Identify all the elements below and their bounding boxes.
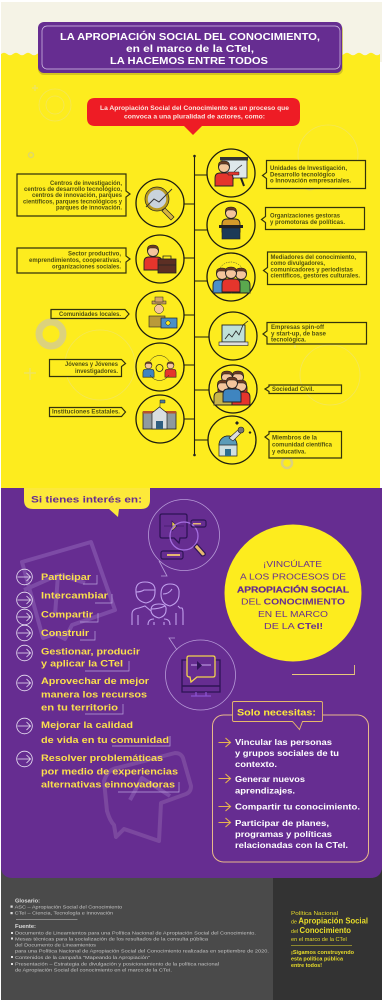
item: resolver: por medio de experiencias <box>41 766 178 776</box>
icon: young people <box>136 343 184 391</box>
item: aprovechar: en tu territorio <box>41 702 118 712</box>
text box: research units <box>262 160 366 188</box>
text box: productive sector: organizaciones sociales. <box>52 264 121 270</box>
heading tab: si tienes interés en <box>24 488 150 517</box>
text box: state institutions: Instituciones Estatales. <box>52 410 120 416</box>
text box: local communities <box>51 310 129 318</box>
item: gestionar <box>17 645 140 671</box>
footer: sources: Mesas técnicas para la socialización de los resultados de la consulta pública <box>15 936 208 941</box>
item: mejorar <box>17 718 170 746</box>
item: aprovechar: manera los recursos <box>41 688 147 700</box>
title text: LA APROPIACIÓN SOCIAL DEL CONOCIMIENTO, <box>60 30 320 43</box>
timeline spine and branches <box>184 155 209 456</box>
item: resolver <box>17 751 179 792</box>
text box: civil society: Sociedad Civil. <box>272 387 314 393</box>
corner accent under circle <box>292 665 354 674</box>
text box: spin-off companies <box>263 322 366 344</box>
item: generar: Generar nuevos <box>235 775 306 784</box>
item: compartir <box>17 608 98 625</box>
text box: policy organizations: Organizaciones gestoras <box>270 214 341 220</box>
title text: LA HACEMOS ENTRE TODOS <box>110 55 268 67</box>
footer: policy branding: entre todos! <box>291 963 322 969</box>
footer: sources: para una Política Nacional de Apropiación Social del Conocimiento realizadas en septiembre de 2020. <box>15 949 269 954</box>
list: interests <box>17 569 179 792</box>
text box: policy organizations <box>262 208 364 230</box>
call to action circle: EN EL MARCO <box>258 610 328 619</box>
icon: policy organizations podium <box>207 201 255 249</box>
call to action circle: A LOS PROCESOS DE <box>240 572 346 582</box>
text box: young people <box>50 360 126 376</box>
item: aprovechar <box>17 675 149 714</box>
callout: red intro bubble <box>87 98 300 135</box>
item: vincular <box>218 738 339 769</box>
heading tab: si tienes interés en: Si tienes interés en: <box>31 494 142 506</box>
footer: policy branding <box>291 911 368 969</box>
item: mejorar: de vida en tu comunidad <box>41 734 169 745</box>
footer: policy branding: Política Nacional <box>291 911 338 917</box>
icon: spin-off laptop <box>209 312 257 360</box>
footer: glossary: ASC – Apropiación Social del Conocimiento <box>15 905 123 910</box>
text box: young people: Jóvenes y Jóvenes <box>65 362 119 368</box>
background: top cream band <box>1 2 382 62</box>
item: participar <box>17 569 97 585</box>
icon: investigation units presenter <box>207 149 255 197</box>
text box: scientific community <box>265 432 342 458</box>
text box: productive sector: Sector productivo, <box>68 251 121 257</box>
footer: sources: Presentación – Estrategia de divulgación y posicionamiento de la política nacional <box>15 962 219 967</box>
text box: local communities: Comunidades locales. <box>59 312 121 318</box>
item: construir: Construir <box>41 627 89 638</box>
item: construir <box>17 625 95 641</box>
text box: research centers: centros de innovación, parques <box>32 193 123 199</box>
footer: glossary: CTeI – Ciencia, Tecnología e Innovación <box>15 911 114 916</box>
call to action circle <box>224 524 362 662</box>
icon: state institutions building <box>136 395 184 443</box>
footer: policy branding: esta política pública <box>291 956 343 962</box>
text box: mediators: comunicadores y periodistas <box>270 267 354 273</box>
text box: productive sector <box>17 248 130 273</box>
callout: red intro bubble: convoca a una pluralidad de actores, como: <box>124 114 265 120</box>
call to action circle: APROPIACIÓN SOCIAL <box>237 586 349 594</box>
item: mejorar: Mejorar la calidad <box>41 719 133 730</box>
title text: en el marco de la CTeI, <box>126 43 254 55</box>
call to action circle: DE LA CTeI! <box>264 622 323 631</box>
heading: solo necesitas <box>232 702 322 730</box>
footer: glossary <box>10 898 123 920</box>
footer: sources: Contenidos de la campaña "Mapeando la Apropiación" <box>15 955 150 960</box>
item: participar de planes: Participar de planes, <box>235 819 329 828</box>
icon: scientific community observatory <box>208 416 256 464</box>
call to action circle: ¡VINCÚLATE <box>263 560 322 569</box>
decorative background shapes <box>24 85 360 468</box>
title text <box>60 30 320 67</box>
item: intercambiar: Intercambiar <box>41 590 108 600</box>
item: compartir conocimiento <box>218 802 360 812</box>
footer: sources: de Apropiación Social del conocimiento en el marco de la CTeI. <box>15 968 172 973</box>
text box: research centers: científicos, parques tecnológicos y <box>23 200 123 206</box>
item: participar de planes <box>218 818 348 850</box>
item: participar de planes: programas y políticas <box>235 830 333 839</box>
footer: glossary: Glosario: <box>15 898 40 904</box>
text box: spin-off companies: y start-up, de base <box>271 331 327 337</box>
item: participar de planes: relacionadas con la CTeI. <box>235 841 348 850</box>
item: gestionar: Gestionar, producir <box>41 646 140 656</box>
icon: family outline <box>132 582 183 625</box>
text box: mediators: Mediadores del conocimiento, <box>270 255 356 261</box>
callout: red intro bubble: La Apropiación Social del Conocimiento es un proceso que <box>100 105 290 112</box>
text box: research centers <box>17 174 130 216</box>
item: resolver: alternativas einnovadoras <box>41 778 175 790</box>
decorative speech bubbles <box>22 542 191 841</box>
footer: sources <box>11 924 269 973</box>
item: generar: aprendizajes. <box>235 786 295 796</box>
panel: purple section <box>1 488 382 878</box>
title banner <box>38 22 343 75</box>
footer background <box>1 860 382 1000</box>
item: participar: Participar <box>41 571 91 582</box>
icon: knowledge mediators group <box>207 253 255 301</box>
text box: spin-off companies: Empresas spin-off <box>271 325 325 331</box>
heading: solo necesitas: Solo necesitas: <box>237 708 316 718</box>
icon: civil society crowd <box>209 365 257 413</box>
text box: policy organizations: y promotoras de políticas. <box>270 220 345 226</box>
background: yellow panel <box>1 53 380 490</box>
footer: policy branding: en el marco de la CTeI <box>291 937 347 943</box>
footer: sources: Documento de Lineamientos para una Política Nacional de Apropiación Social del Conocimiento. <box>15 931 256 936</box>
text box: research centers: Centros de investigación, <box>50 181 122 187</box>
item: aprovechar: Aprovechar de mejor <box>41 675 149 686</box>
item: vincular: contexto. <box>235 760 277 769</box>
panel: solo necesitas <box>212 702 368 862</box>
call to action circle: DEL CONOCIMIENTO <box>241 598 345 606</box>
footer: policy branding: del Conocimiento <box>291 926 351 935</box>
footer: sources: del Documento de Lineamientos <box>15 943 97 948</box>
icon: monitor circle with video bubble <box>166 638 236 710</box>
text box: mediators: científicos, gestores culturales. <box>270 274 360 280</box>
text box: research units: o Innovación empresariales. <box>270 178 351 184</box>
item: vincular: Vincular las personas <box>235 738 333 747</box>
item: resolver: Resolver problemáticas <box>41 752 163 763</box>
item: generar <box>218 774 306 796</box>
footer: policy branding: de Apropiación Social <box>291 916 368 926</box>
icon: research centers magnifier <box>136 179 184 227</box>
icon: productive sector briefcase <box>136 235 184 283</box>
item: intercambiar <box>17 590 112 608</box>
text box: scientific community: Miembros de la <box>272 436 318 442</box>
item: compartir conocimiento: Compartir tu conocimiento. <box>235 802 360 812</box>
text box: mediators: como divulgadores, <box>270 261 325 267</box>
text box: spin-off companies: tecnológica. <box>271 338 306 344</box>
icon: local communities farmer <box>136 291 184 339</box>
footer: policy branding: ¡Sigamos construyendo <box>291 950 354 956</box>
item: compartir: Compartir <box>41 608 93 620</box>
text box: scientific community: y educativa. <box>272 450 306 456</box>
text box: research centers: centros de desarrollo tecnológico, <box>24 187 122 193</box>
text box: research centers: parques de innovación. <box>56 206 122 212</box>
text box: mediators <box>264 252 366 284</box>
text box: productive sector: emprendimientos, cooperativas, <box>29 258 121 264</box>
text box: state institutions <box>50 408 126 416</box>
text box: scientific community: comunidad científica <box>272 442 333 448</box>
item: vincular: y grupos sociales de tu <box>235 749 339 758</box>
text box: young people: investigadores. <box>75 369 118 375</box>
text box: civil society <box>265 385 342 394</box>
text box: research units: Desarrollo tecnológico <box>270 172 335 178</box>
footer: sources: Fuente: <box>15 924 36 930</box>
item: gestionar: y aplicar la CTeI <box>41 658 123 668</box>
icon: search circle with video bubble <box>148 500 220 576</box>
text box: research units: Unidades de Investigación, <box>270 166 347 172</box>
